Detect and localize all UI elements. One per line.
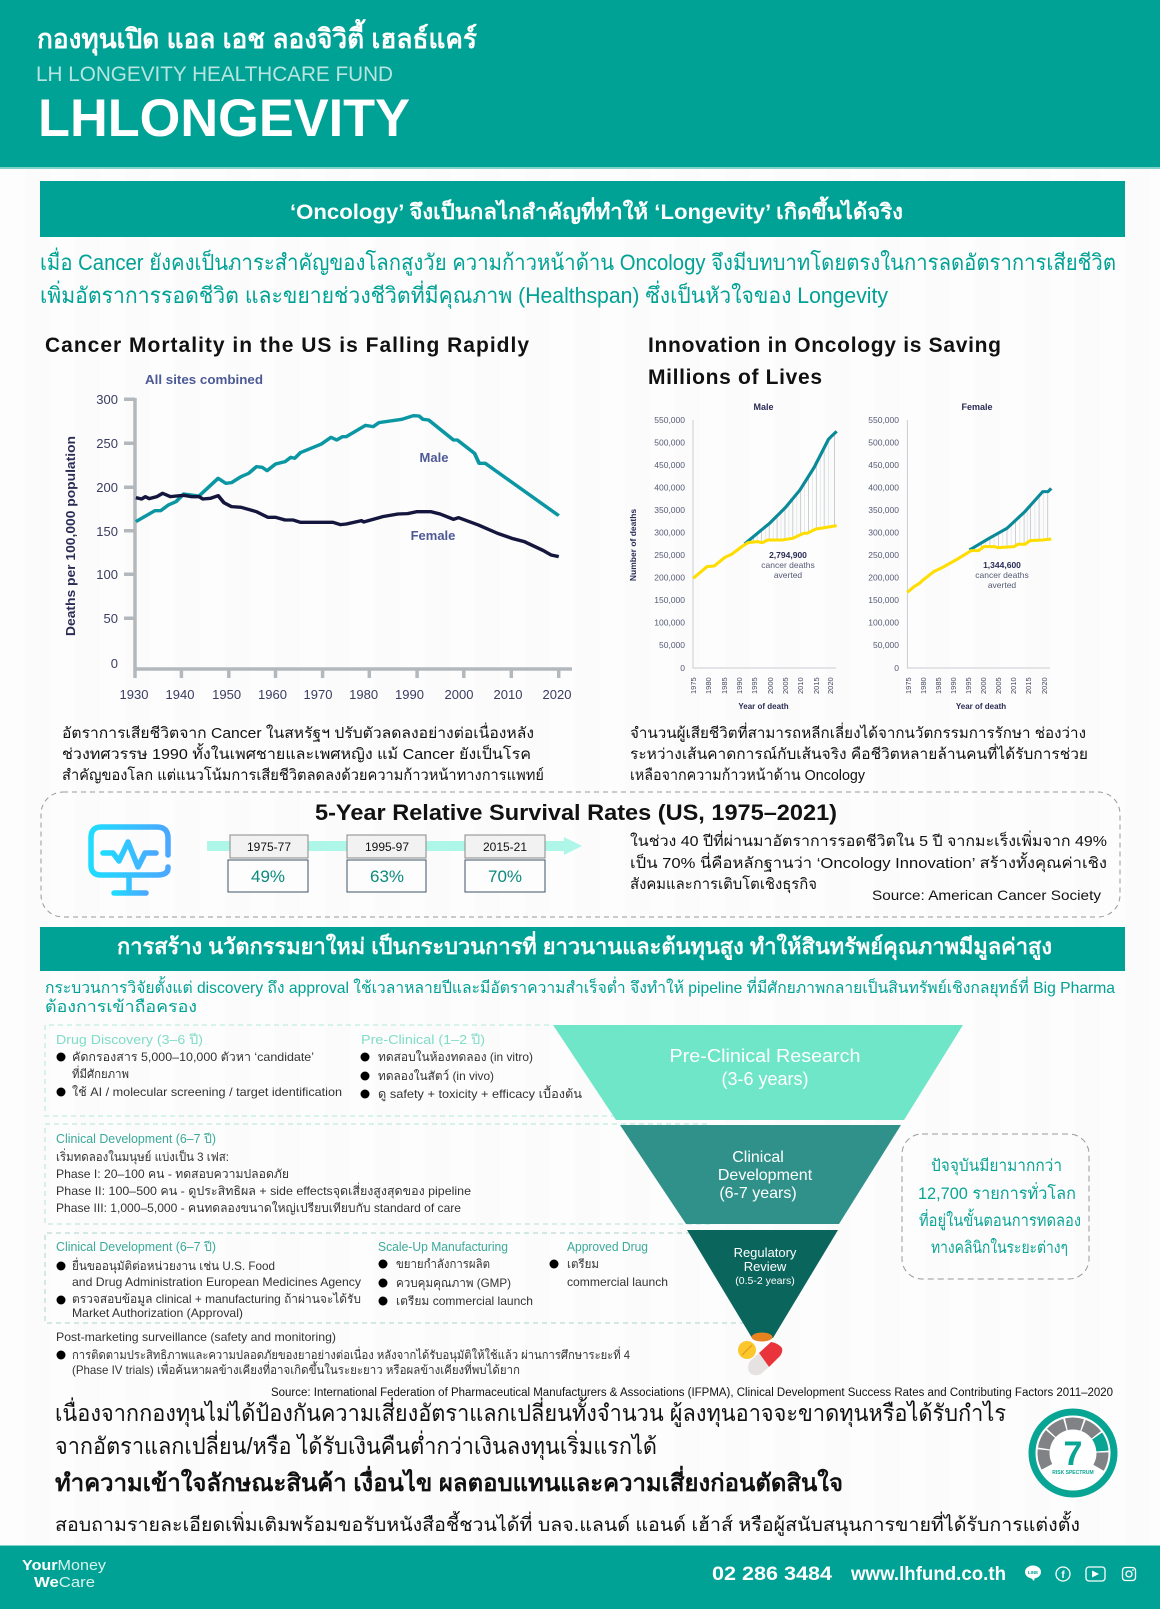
line chart: cancer mortality: 250 — [96, 436, 118, 451]
phone and website: 02 286 3484 — [712, 1563, 832, 1585]
funnel: clinical development — [620, 1125, 901, 1224]
female chart: 2000 — [979, 677, 988, 694]
panel: discovery and pre-clinical: ทดลองในสัตว์ (in vivo) — [378, 1069, 494, 1083]
header Thai title: กองทุนเปิด แอล เอช ลองจิวิตี้ เฮลธ์แคร์ — [37, 18, 477, 56]
line chart: cancer mortality: 200 — [96, 480, 118, 495]
panel: discovery and pre-clinical: ที่มีศักยภาพ — [72, 1065, 129, 1081]
female chart: 1975 — [904, 677, 913, 694]
funnel: regulatory review: (0.5-2 years) — [735, 1275, 795, 1287]
male chart: 0 — [680, 663, 685, 673]
female chart: 450,000 — [868, 460, 899, 470]
panel: regulatory and manufacturing: and Drug Administration European Medicines Agency — [72, 1275, 361, 1289]
section banner: oncology: ‘Oncology’ จึงเป็นกลไกสำคัญที่ทำให้ ‘Longevity’ เกิดขึ้นได้จริง — [290, 196, 903, 225]
timeline: 1995-97: 63% — [370, 867, 404, 886]
male chart: 1995 — [750, 677, 759, 694]
panel: clinical development: Clinical Development (6–7 ปี) — [56, 1132, 216, 1146]
female chart: 200,000 — [868, 572, 899, 582]
panel: regulatory and manufacturing: Market Authorization (Approval) — [72, 1306, 243, 1320]
callout: drugs in clinical trials: ปัจจุบันมียามากกว่า — [931, 1157, 1062, 1176]
male chart: 500,000 — [654, 437, 685, 447]
male chart: 1985 — [720, 677, 729, 694]
icon: risk spectrum 7: RISK SPECTRUM — [1052, 1470, 1094, 1476]
female chart: 2010 — [1009, 677, 1018, 694]
risk warning text: สอบถามรายละเอียดเพิ่มเติมพร้อมขอรับหนังสือชี้ชวนได้ที่ บลจ.แลนด์ แอนด์ เฮ้าส์ หรือผู้สนับสนุนการขายที่ได้รับการแต่งตั้ง — [55, 1511, 1080, 1537]
male chart: 2010 — [796, 677, 805, 694]
line chart: cancer mortality: Male — [420, 450, 448, 465]
male chart: 250,000 — [654, 550, 685, 560]
survival heading: 5-Year Relative Survival Rates (US, 1975–2021) — [315, 800, 837, 825]
timeline: 1995-97 — [347, 835, 426, 892]
female chart: 150,000 — [868, 595, 899, 605]
male chart: 50,000 — [659, 640, 685, 650]
risk warning text: จากอัตราแลกเปลี่ยน/หรือ ได้รับเงินคืนต่ำกว่าเงินลงทุนเริ่มแรกได้ — [55, 1430, 657, 1460]
line chart: cancer mortality: 1950 — [212, 687, 241, 702]
timeline: 2015-21: 70% — [488, 867, 522, 886]
source line: Source: International Federation of Pharmaceutical Manufacturers & Associations (IFPMA), Clinical Development Success Rates and Contributing Factors 2011–2020 — [271, 1387, 1113, 1399]
female chart: 550,000 — [868, 415, 899, 425]
line chart: cancer mortality: 50 — [104, 611, 118, 626]
funnel: regulatory review: Review — [744, 1259, 787, 1274]
male chart: 1975 — [689, 677, 698, 694]
female chart: 500,000 — [868, 437, 899, 447]
line chart: cancer mortality: 1940 — [166, 687, 194, 702]
funnel: pre-clinical research: (3-6 years) — [721, 1069, 809, 1089]
icon: line: LINE — [1028, 1570, 1038, 1575]
timeline: 1995-97: 1995-97 — [365, 840, 409, 854]
female chart: 2015 — [1024, 677, 1033, 694]
line chart: cancer mortality: 150 — [96, 524, 118, 539]
caption: deaths averted charts: เหลือจากความก้าวหน้าด้าน Oncology — [630, 767, 865, 784]
funnel: clinical development: Development — [718, 1167, 813, 1184]
risk warning text: เนื่องจากกองทุนไม่ได้ป้องกันความเสี่ยงอัตราแลกเปลี่ยนทั้งจำนวน ผู้ลงทุนอาจจะขาดทุนหรือได้รับกำไร — [55, 1397, 1006, 1427]
male chart — [654, 402, 837, 711]
line chart: cancer mortality: 2020 — [543, 687, 571, 702]
caption: deaths averted charts: ระหว่างเส้นคาดการณ์กับเส้นจริง คือชีวิตหลายล้านคนที่ได้รับการช่วย — [630, 743, 1088, 763]
female chart: 100,000 — [868, 617, 899, 627]
icon: youtube — [1086, 1567, 1105, 1581]
caption: mortality chart: ช่วงทศวรรษ 1990 ทั้งในเพศชายและเพศหญิง แม้ Cancer ยังเป็นโรค — [62, 743, 531, 763]
icon: monitor with pulse — [91, 827, 168, 893]
male chart: 200,000 — [654, 572, 685, 582]
panel: discovery and pre-clinical: ดู safety + toxicity + efficacy เบื้องต้น — [378, 1085, 582, 1102]
panel: clinical development: Phase I: 20–100 คน - ทดสอบความปลอดภัย — [56, 1167, 289, 1181]
panel: discovery and pre-clinical: Drug Discovery (3–6 ปี) — [56, 1032, 203, 1047]
male chart: 1980 — [704, 677, 713, 694]
female chart: 1995 — [964, 677, 973, 694]
caption: deaths averted charts — [630, 722, 1088, 784]
caption: deaths averted charts: จำนวนผู้เสียชีวิตที่สามารถหลีกเลี่ยงได้จากนวัตกรรมการรักษา ช่องว่าง — [630, 722, 1086, 742]
caption: mortality chart: อัตราการเสียชีวิตจาก Cancer ในสหรัฐฯ ปรับตัวลดลงอย่างต่อเนื่องหลัง — [62, 722, 534, 742]
charts: cancer deaths averted — [628, 402, 1051, 711]
logo: your money we care: WeCare — [34, 1574, 95, 1591]
female chart: 2020 — [1040, 677, 1049, 694]
female chart: averted — [988, 580, 1016, 590]
phone and website: www.lhfund.co.th — [850, 1563, 1006, 1585]
timeline: 1975-77: 1975-77 — [247, 840, 291, 854]
panel: clinical development: Phase III: 1,000–5,000 - คนทดลองขนาดใหญ่เปรียบเทียบกับ standard of care — [56, 1201, 461, 1215]
post-marketing text — [56, 1330, 630, 1377]
icon: facebook — [1056, 1567, 1070, 1581]
female chart: 250,000 — [868, 550, 899, 560]
female chart: 1,344,600 — [983, 560, 1021, 570]
male chart: Male — [753, 402, 774, 412]
icon: facebook: f — [1061, 1570, 1065, 1581]
panel: regulatory and manufacturing — [45, 1233, 745, 1323]
line chart: cancer mortality: 1980 — [349, 687, 378, 702]
male chart: averted — [774, 570, 802, 580]
panel: regulatory and manufacturing: Approved Drug — [567, 1240, 648, 1254]
callout: drugs in clinical trials: 12,700 รายการทั่วโลก — [918, 1182, 1076, 1203]
line chart: cancer mortality: All sites combined — [145, 372, 263, 387]
section banner: drug development: การสร้าง นวัตกรรมยาใหม่ เป็นกระบวนการที่ ยาวนานและต้นทุนสูง ทำให้สินทรัพย์คุณภาพมีมูลค่าสูง — [117, 930, 1052, 961]
survival text: สังคมและการเติบโตเชิงธุรกิจ — [630, 875, 817, 894]
panel: regulatory and manufacturing: commercial launch — [567, 1275, 668, 1289]
caption: mortality chart: สำคัญของโลก แต่แนวโน้มการเสียชีวิตลดลงด้วยความก้าวหน้าทางการแพทย์ — [62, 766, 544, 784]
timeline arrow — [207, 837, 582, 855]
survival text: เป็น 70% นี่คือหลักฐานว่า ‘Oncology Innovation’ สร้างทั้งคุณค่าเชิง — [630, 852, 1107, 873]
male chart: Year of death — [738, 702, 789, 711]
male chart: 150,000 — [654, 595, 685, 605]
line chart: cancer mortality: 100 — [96, 567, 118, 582]
panel: clinical development — [45, 1124, 710, 1224]
line chart: cancer mortality: 2010 — [494, 687, 522, 702]
callout: drugs in clinical trials: ที่อยู่ในขั้นตอนการทดลอง — [919, 1208, 1081, 1231]
intro paragraph: เพิ่มอัตราการรอดชีวิต และขยายช่วงชีวิตที่มีคุณภาพ (Healthspan) ซึ่งเป็นหัวใจของ Longevity — [40, 280, 888, 309]
timeline: 1975-77: 49% — [251, 867, 285, 886]
survival text: ในช่วง 40 ปีที่ผ่านมาอัตราการรอดชีวิตใน 5 ปี จากมะเร็งเพิ่มจาก 49% — [630, 830, 1107, 850]
line chart: cancer mortality: 1970 — [304, 687, 332, 702]
drug development paragraph — [45, 976, 1115, 1016]
male chart: 400,000 — [654, 482, 685, 492]
icon: instagram — [1122, 1568, 1136, 1580]
header band — [0, 0, 1160, 169]
funnel: pre-clinical research: Pre-Clinical Research — [670, 1046, 860, 1066]
panel: discovery and pre-clinical — [45, 1025, 616, 1116]
panel: regulatory and manufacturing: Scale-Up Manufacturing — [378, 1240, 508, 1254]
panel: regulatory and manufacturing: ตรวจสอบข้อมูล clinical + manufacturing ถ้าผ่านจะได้รับ — [72, 1292, 361, 1307]
post-marketing text: การติดตามประสิทธิภาพและความปลอดภัยของยาอย่างต่อเนื่อง หลังจากได้รับอนุมัติให้ใช้แล้ว ผ่านการศึกษาระยะที่ 4 — [72, 1346, 630, 1363]
panel: clinical development: เริ่มทดลองในมนุษย์ แบ่งเป็น 3 เฟส: — [56, 1148, 229, 1165]
footer band — [0, 1545, 1160, 1609]
female chart: Female — [961, 402, 993, 412]
callout: drugs in clinical trials — [902, 1134, 1089, 1279]
risk warning text: ทำความเข้าใจลักษณะสินค้า เงื่อนไข ผลตอบแทนและความเสี่ยงก่อนตัดสินใจ — [55, 1465, 843, 1497]
logo: your money we care: YourMoney — [22, 1557, 107, 1574]
female chart: 300,000 — [868, 527, 899, 537]
panel: regulatory and manufacturing: ควบคุมคุณภาพ (GMP) — [396, 1276, 511, 1291]
female line — [136, 493, 559, 557]
intro paragraph — [40, 247, 1116, 309]
panel: survival rates — [41, 792, 1120, 917]
section banner: drug development — [40, 927, 1125, 971]
post-marketing text: (Phase IV trials) เพื่อค้นหาผลข้างเคียงที่อาจเกิดขึ้นในระยะยาว หรือผลข้างเคียงที่พบได้ยาก — [72, 1361, 520, 1377]
male chart: 2000 — [766, 677, 775, 694]
male chart: 100,000 — [654, 617, 685, 627]
icon: risk spectrum 7: 7 — [1064, 1435, 1082, 1473]
survival text: Source: American Cancer Society — [872, 887, 1101, 903]
panel: regulatory and manufacturing: Clinical Development (6–7 ปี) — [56, 1240, 216, 1254]
male chart: 550,000 — [654, 415, 685, 425]
panel: discovery and pre-clinical: ใช้ AI / molecular screening / target identification — [72, 1085, 342, 1099]
funnel: clinical development: Clinical — [732, 1149, 784, 1166]
male chart: 2005 — [781, 677, 790, 694]
female chart: Year of death — [956, 702, 1006, 711]
panel: discovery and pre-clinical: Pre-Clinical (1–2 ปี) — [361, 1032, 485, 1047]
male chart: 300,000 — [654, 527, 685, 537]
risk warning text — [55, 1397, 1080, 1537]
drug development paragraph: ต้องการเข้าถือครอง — [45, 998, 197, 1016]
callout: drugs in clinical trials: ทางคลินิกในระยะต่างๆ — [931, 1238, 1068, 1257]
female chart: 1985 — [934, 677, 943, 694]
heading: cancer mortality: Cancer Mortality in the US is Falling Rapidly — [45, 334, 529, 357]
line chart: cancer mortality: Female — [411, 528, 455, 543]
female chart: 0 — [894, 663, 899, 673]
line chart: cancer mortality: 300 — [96, 392, 118, 407]
survival text — [630, 830, 1107, 903]
icon: pills — [738, 1332, 782, 1375]
line chart: cancer mortality: 1930 — [120, 687, 148, 702]
male chart: 2015 — [812, 677, 821, 694]
male chart: 350,000 — [654, 505, 685, 515]
caption: mortality chart — [62, 722, 544, 784]
panel: discovery and pre-clinical: ทดสอบในห้องทดลอง (in vitro) — [378, 1050, 533, 1064]
female chart: cancer deaths — [975, 570, 1029, 580]
male line — [136, 416, 559, 522]
line chart: cancer mortality: 2000 — [445, 687, 473, 702]
section banner: oncology — [40, 181, 1125, 237]
funnel: clinical development: (6-7 years) — [719, 1185, 797, 1202]
panel: regulatory and manufacturing: เตรียม commercial launch — [396, 1294, 533, 1308]
line chart: cancer mortality: 1960 — [258, 687, 287, 702]
drug development paragraph: กระบวนการวิจัยตั้งแต่ discovery ถึง approval ใช้เวลาหลายปีและมีอัตราความสำเร็จต่ำ จึงทำให้ pipeline ที่มีศักยภาพกลายเป็นสินทรัพย์เชิงกลยุทธ์ที่ Big Pharma — [45, 976, 1115, 998]
icon: line — [1025, 1566, 1041, 1581]
heading: innovation in oncology: Millions of Lives — [648, 366, 822, 389]
heading: innovation in oncology: Innovation in Oncology is Saving — [648, 334, 1001, 357]
male chart: 1990 — [735, 677, 744, 694]
logo: your money we care — [22, 1557, 107, 1591]
male chart: 2,794,900 — [769, 550, 807, 560]
female chart: 1980 — [919, 677, 928, 694]
female chart: 350,000 — [868, 505, 899, 515]
funnel: regulatory review: Regulatory — [734, 1245, 797, 1260]
male chart: 450,000 — [654, 460, 685, 470]
male chart: cancer deaths — [761, 560, 815, 570]
panel: regulatory and manufacturing: เตรียม — [567, 1257, 599, 1271]
header English subtitle: LH LONGEVITY HEALTHCARE FUND — [36, 63, 393, 86]
line chart: cancer mortality: Deaths per 100,000 population — [64, 436, 78, 636]
female chart — [868, 402, 1051, 711]
funnel: pre-clinical research — [553, 1025, 963, 1120]
post-marketing text: Post-marketing surveillance (safety and monitoring) — [56, 1330, 336, 1344]
female chart: 50,000 — [873, 640, 899, 650]
male chart: 2020 — [826, 677, 835, 694]
phone and website — [712, 1563, 1006, 1585]
panel: regulatory and manufacturing: ยื่นขออนุมัติต่อหน่วยงาน เช่น U.S. Food — [72, 1257, 275, 1274]
female chart: 400,000 — [868, 482, 899, 492]
funnel: regulatory review — [687, 1230, 838, 1338]
line chart: cancer mortality: 1990 — [395, 687, 424, 702]
panel: discovery and pre-clinical: คัดกรองสาร 5,000–10,000 ตัวหา ‘candidate’ — [72, 1050, 314, 1064]
line chart: cancer mortality: 0 — [111, 656, 118, 671]
timeline: 1975-77 — [228, 835, 308, 892]
female chart: 2005 — [994, 677, 1003, 694]
line chart: cancer mortality — [64, 372, 572, 702]
timeline: 2015-21: 2015-21 — [483, 840, 527, 854]
panel: clinical development: Phase II: 100–500 คน - ดูประสิทธิผล + side effectsจุดเสี่ยงสูงสุดของ pipeline — [56, 1182, 471, 1199]
panel: regulatory and manufacturing: ขยายกำลังการผลิต — [396, 1257, 490, 1271]
female chart: 1990 — [949, 677, 958, 694]
timeline: 2015-21 — [465, 835, 545, 892]
heading: innovation in oncology — [648, 334, 1001, 389]
fund code: LHLONGEVITY — [38, 89, 410, 148]
icon: risk spectrum 7 — [1032, 1412, 1114, 1494]
charts: cancer deaths averted: Number of deaths — [628, 509, 638, 581]
